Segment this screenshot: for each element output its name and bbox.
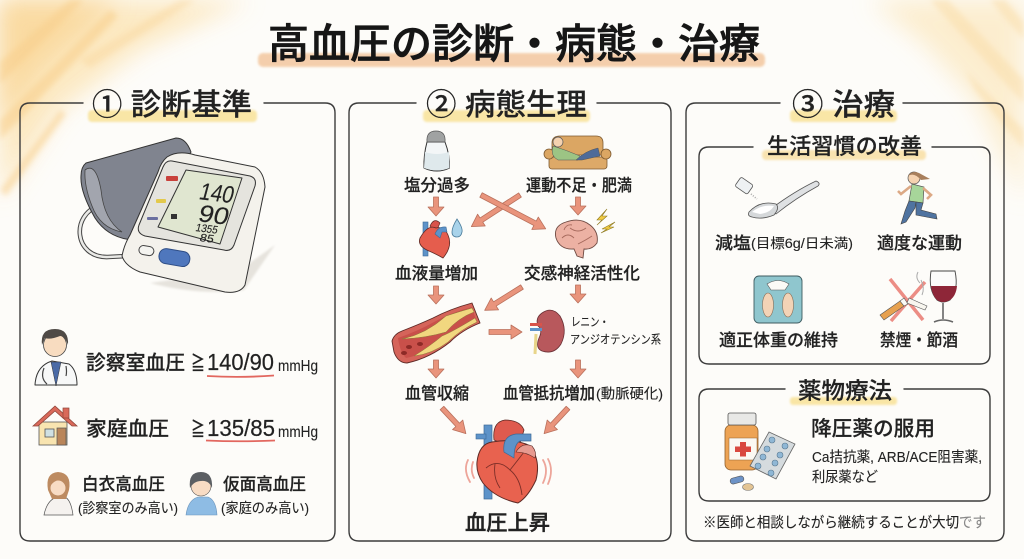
label: increased vascular resistance bbox=[503, 384, 663, 403]
label: office blood pressure: 診察室血圧 bbox=[86, 352, 185, 374]
label: excess salt: 塩分過多 bbox=[404, 176, 470, 195]
panel: treatment bbox=[686, 89, 1004, 541]
arrow: inactivity to sympathetic bbox=[570, 197, 586, 215]
icon: blood pressure monitor: 90 bbox=[195, 201, 232, 230]
label: home blood pressure: 家庭血圧 bbox=[86, 418, 169, 440]
icon: person on sofa bbox=[544, 136, 611, 169]
label: medication classes bbox=[812, 449, 982, 486]
label: renin-angiotensin system bbox=[570, 315, 661, 346]
icon: man patient bbox=[186, 472, 217, 515]
arrow: kidney to resistance bbox=[570, 360, 586, 378]
label: renin-angiotensin system: アンジオテンシン系 bbox=[570, 332, 661, 346]
icon: heart with water drop bbox=[419, 219, 462, 258]
value: office threshold: mmHg bbox=[278, 358, 318, 375]
icon: brain with lightning bbox=[555, 209, 615, 258]
label: blood pressure rise: 血圧上昇 bbox=[465, 512, 550, 535]
icon: doctor bbox=[35, 329, 77, 386]
value: office threshold: ≧ bbox=[191, 352, 205, 374]
label: moderate exercise: 適度な運動 bbox=[877, 234, 962, 253]
value: home threshold bbox=[191, 415, 318, 441]
arrow: salt to blood volume bbox=[428, 197, 444, 216]
label: salt reduction bbox=[715, 234, 853, 253]
label: increased vascular resistance: (動脈硬化) bbox=[596, 386, 663, 402]
icon: blood pressure monitor bbox=[80, 138, 275, 292]
label: increased blood volume: 血液量増加 bbox=[395, 264, 478, 283]
panel: drug therapy bbox=[699, 378, 990, 532]
label: renin-angiotensin system: レニン・ bbox=[571, 315, 609, 329]
heading: pathophysiology: ② 病態生理 bbox=[426, 89, 587, 122]
label: masked hypertension bbox=[221, 475, 309, 516]
label: salt reduction: 減塩 bbox=[715, 234, 751, 253]
value: office threshold bbox=[191, 349, 318, 377]
icon: narrowed artery bbox=[392, 303, 480, 363]
heading: lifestyle: 生活習慣の改善 bbox=[767, 134, 922, 159]
icon: bathroom scale bbox=[754, 276, 802, 323]
icon: salt and spoon bbox=[735, 177, 819, 218]
arrow: vessel to constriction bbox=[428, 360, 444, 378]
heading: treatment: ③ 治療 bbox=[792, 89, 895, 122]
icon: blood pressure monitor: 1355 bbox=[194, 222, 219, 237]
icon: salt shaker bbox=[424, 131, 450, 171]
label: healthy weight: 適正体重の維持 bbox=[719, 331, 838, 350]
label: no smoking, limited alcohol: 禁煙・節酒 bbox=[880, 331, 958, 350]
label: masked hypertension: 仮面高血圧 bbox=[223, 475, 306, 494]
label: medication classes: Ca拮抗薬, ARB/ACE阻害薬, bbox=[812, 449, 982, 466]
title: 高血圧の診断・病態・治療 bbox=[268, 21, 760, 67]
label: white coat hypertension: (診察室のみ高い) bbox=[78, 500, 178, 516]
label: white coat hypertension bbox=[78, 475, 178, 516]
icon: woman doctor bbox=[44, 472, 73, 515]
arrow: sympathetic to vessel bbox=[481, 281, 526, 316]
value: office threshold: 140/90 bbox=[207, 349, 274, 375]
icon: kidney bbox=[530, 310, 564, 354]
icon: blood pressure monitor: 140 bbox=[196, 179, 237, 209]
panel: pathophysiology bbox=[349, 89, 671, 541]
arrow: inactivity to blood volume bbox=[468, 189, 524, 232]
arrow: blood volume to vessel bbox=[428, 286, 444, 304]
arrow: sympathetic to renin bbox=[570, 285, 586, 303]
icon: house bbox=[33, 406, 77, 445]
value: home threshold: mmHg bbox=[278, 424, 318, 441]
arrow: salt to sympathetic bbox=[478, 189, 549, 235]
arrow: constriction to blood pressure rise bbox=[437, 403, 471, 438]
label: sympathetic activation: 交感神経活性化 bbox=[524, 264, 641, 283]
value: home threshold: 135/85 bbox=[207, 415, 275, 441]
label: lack of exercise and obesity: 運動不足・肥満 bbox=[526, 176, 632, 195]
label: increased vascular resistance: 血管抵抗増加 bbox=[503, 384, 595, 403]
panel: diagnostic criteria bbox=[20, 89, 335, 541]
footnote: ※医師と相談しながら継続することが大切です bbox=[703, 514, 986, 532]
heading: diagnostic criteria: ① 診断基準 bbox=[92, 89, 252, 122]
label: masked hypertension: (家庭のみ高い) bbox=[221, 500, 309, 516]
label: salt reduction: (目標6g/日未満) bbox=[751, 236, 853, 251]
icon: blood pressure monitor: 85 bbox=[198, 232, 215, 246]
heading: drug therapy: 薬物療法 bbox=[798, 378, 892, 404]
icon: runner bbox=[898, 172, 937, 224]
icon: medicine bottle and pills bbox=[725, 413, 795, 490]
icon: large heart bbox=[466, 420, 551, 503]
label: vasoconstriction: 血管収縮 bbox=[405, 384, 469, 403]
label: antihypertensive medication: 降圧薬の服用 bbox=[811, 418, 935, 440]
panel: lifestyle improvements bbox=[699, 134, 990, 364]
arrow: vessel to kidney bbox=[489, 325, 522, 339]
label: medication classes: 利尿薬など bbox=[812, 469, 878, 486]
arrow: resistance to blood pressure rise bbox=[539, 403, 573, 438]
icon: no smoking and wine bbox=[880, 271, 957, 322]
value: home threshold: ≧ bbox=[191, 418, 205, 440]
label: white coat hypertension: 白衣高血圧 bbox=[82, 475, 165, 494]
